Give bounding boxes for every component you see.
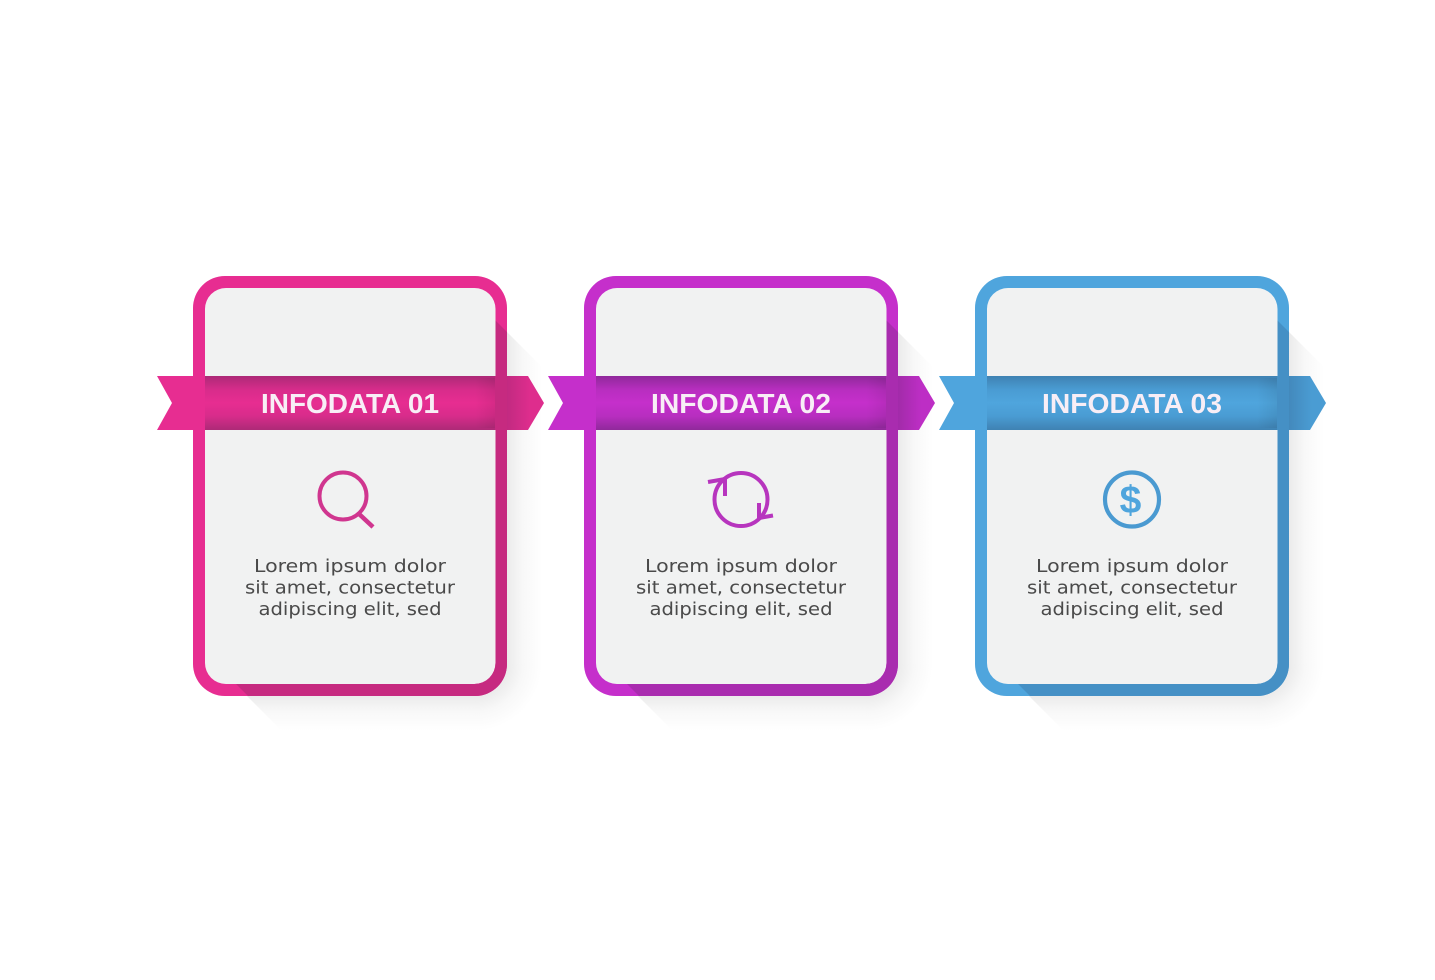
text block [245,556,456,620]
text block: sit amet, consectetur [245,578,456,598]
text block [636,556,847,620]
text block: Lorem ipsum dolor [645,556,838,577]
icon: refresh arrows [708,473,773,526]
text block: sit amet, consectetur [1027,578,1238,598]
heading: INFODATA 02 [651,388,831,419]
text block: adipiscing elit, sed [1040,599,1224,620]
heading: INFODATA 03 [1042,388,1222,419]
icon: dollar coin: $ [1120,479,1142,522]
text block: Lorem ipsum dolor [1036,556,1229,577]
ribbon [548,376,935,430]
text block: Lorem ipsum dolor [254,556,447,577]
text block: adipiscing elit, sed [258,599,442,620]
ribbon [157,376,544,430]
icon: dollar coin [1105,472,1159,526]
panel: infodata 03 [939,276,1327,734]
ribbon [939,376,1326,430]
text block: sit amet, consectetur [636,578,847,598]
text block [1027,556,1238,620]
panel: infodata 02 [548,276,936,734]
icon: magnifier [320,472,373,527]
heading: INFODATA 01 [261,388,439,419]
text block: adipiscing elit, sed [650,599,832,620]
panel: infodata 01 [157,276,545,734]
